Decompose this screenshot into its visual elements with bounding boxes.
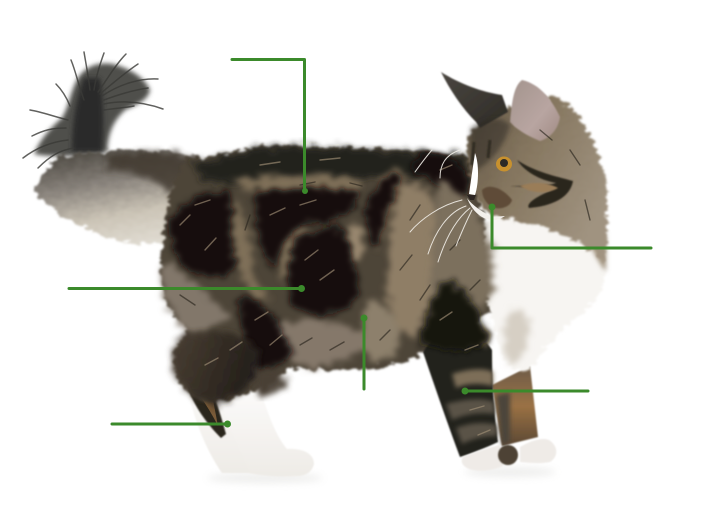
cat white front paws bbox=[462, 439, 556, 471]
muzzle white bbox=[467, 198, 505, 220]
floor shadows bbox=[207, 467, 556, 483]
cat tail tuft bbox=[23, 52, 163, 168]
callout lines bbox=[69, 60, 651, 428]
cheek dark stripe bbox=[510, 160, 573, 208]
callout: hind paw bbox=[112, 420, 231, 428]
muzzle tan bbox=[482, 187, 512, 208]
callout: front leg bbox=[462, 388, 588, 394]
callout: belly bbox=[360, 314, 368, 389]
cat chest shading bbox=[504, 310, 530, 366]
cat tail base bbox=[35, 150, 195, 244]
cat head bbox=[441, 72, 607, 262]
cat neck fur bbox=[430, 180, 494, 318]
cat dark stripes bbox=[168, 154, 470, 369]
cat body fur bbox=[160, 146, 500, 403]
face white blaze bbox=[469, 153, 478, 195]
eye bbox=[496, 156, 512, 172]
cat far front leg bbox=[492, 366, 538, 446]
head fur mass bbox=[467, 98, 607, 262]
cat hind knee patch bbox=[255, 370, 288, 395]
callout: flank bbox=[69, 285, 305, 292]
cat leg stripes bbox=[446, 322, 497, 444]
cat tail stripe bbox=[108, 152, 200, 196]
cat mane lower edge bbox=[580, 225, 606, 272]
forehead stripes bbox=[472, 140, 490, 165]
cat rear leg white paws bbox=[187, 383, 314, 476]
whiskers bbox=[410, 150, 472, 262]
cat near front leg bbox=[423, 330, 498, 457]
cat far leg tint bbox=[496, 392, 510, 445]
callout: back bbox=[232, 60, 308, 194]
cat tan patches bbox=[161, 170, 443, 366]
callout: muzzle bbox=[488, 204, 651, 248]
left ear bbox=[441, 72, 508, 128]
cat neck dark patch bbox=[420, 281, 490, 350]
cat chest white ruff bbox=[484, 216, 605, 371]
cheek tan bbox=[520, 183, 558, 192]
fur strokes bbox=[180, 130, 590, 435]
right ear bbox=[510, 80, 560, 141]
nose bbox=[467, 195, 476, 200]
cat back dark saddle bbox=[190, 147, 465, 184]
ear shadow on head bbox=[470, 119, 510, 172]
cat rear thigh dark bbox=[172, 332, 259, 404]
